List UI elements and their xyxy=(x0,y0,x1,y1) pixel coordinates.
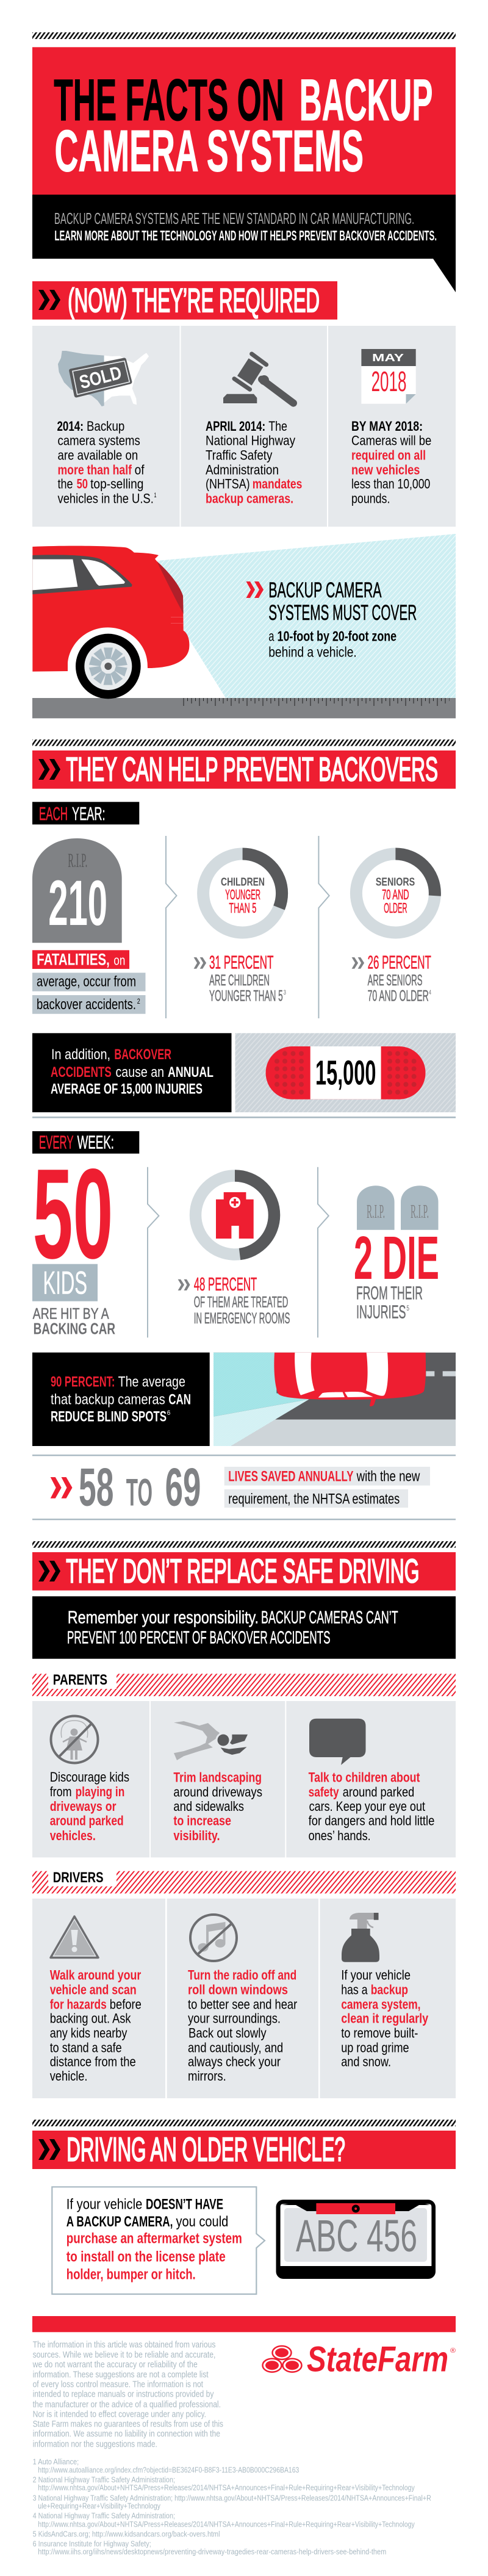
text: walk around xyxy=(50,1967,142,2084)
heading: (now) they're required xyxy=(32,281,337,320)
text: talk to children: Talk to children about xyxy=(309,1770,420,1785)
heading: drivers xyxy=(32,1869,456,1893)
panel: bandage 15,000 xyxy=(235,1033,456,1112)
text: sources: ule+Requiring+Rear+Visibility+Technology xyxy=(38,2502,161,2511)
text: 2014: are available on xyxy=(57,447,138,462)
callout: aftermarket system: If your vehicle xyxy=(66,2196,142,2213)
panel: top view car xyxy=(214,1353,456,1446)
text: clean camera: and snow. xyxy=(341,2054,391,2070)
text: turn the radio off: Back out slowly xyxy=(188,2025,267,2040)
stat: 50 kids: BACKING CAR xyxy=(34,1321,115,1338)
stat: 48 percent xyxy=(178,1274,290,1327)
text: clean camera: up road grime xyxy=(341,2040,409,2055)
text: walk around: to stand a safe xyxy=(50,2040,122,2055)
stat: 26 percent: ARE SENIORS xyxy=(368,972,422,989)
text: 2014: 1 xyxy=(154,492,156,499)
stat: 31 percent: ARE CHILDREN xyxy=(209,972,270,989)
icon: wheel xyxy=(76,634,141,699)
stat: children donut: CHILDREN xyxy=(221,876,265,888)
stat: 58 to 69 lives saved: TO xyxy=(126,1472,152,1514)
panel: 90 percent text: REDUCE BLIND SPOTS xyxy=(51,1408,167,1425)
icon: car side view xyxy=(32,546,189,699)
text: turn the radio off: mirrors. xyxy=(188,2068,226,2084)
text: walk around: vehicle and scan xyxy=(50,1982,137,1997)
text: april 2014: Traffic Safety xyxy=(206,447,272,462)
tombstone: 210: R.I.P. xyxy=(68,850,87,872)
stat: 31 percent xyxy=(194,952,286,1005)
text: sources: 6 Insurance Institute for Highway Safety; xyxy=(33,2540,151,2549)
logo: state farm: ® xyxy=(450,2347,456,2355)
text: discourage kids xyxy=(50,1769,129,1843)
text: clean camera: If your vehicle xyxy=(341,1967,411,1982)
heading: drivers: DRIVERS xyxy=(53,1869,104,1886)
icon: calendar: MAY xyxy=(372,351,404,364)
text: 2014: top-selling xyxy=(90,476,143,491)
text: sources: 2 National Highway Traffic Safety Administration; xyxy=(33,2476,175,2484)
icon: two tombstones xyxy=(357,1185,438,1230)
stat: seniors donut: 70 AND xyxy=(382,887,409,902)
text: sources: http://www.nhtsa.gov/About+NHTSA/Press+Releases/2014/NHTSA+Announces+Final+Rule+Requiring+Rear+Visibility+Technology xyxy=(38,2484,415,2492)
text: disclaimer: information. We assume no liability in connection with the xyxy=(33,2430,220,2439)
callout: backup camera coverage: a xyxy=(268,628,274,644)
panel: april 2014 xyxy=(181,326,327,527)
panel: injuries text: cause an xyxy=(116,1064,164,1081)
panel: injuries text: AVERAGE OF 15,000 INJURIES xyxy=(51,1081,203,1098)
text: talk to children: safety xyxy=(309,1784,339,1799)
text: 2014: vehicles in the U.S. xyxy=(57,491,154,506)
panel: 90 percent text: that backup cameras xyxy=(51,1392,165,1408)
text: clean camera xyxy=(341,1967,429,2070)
text: april 2014: backup cameras. xyxy=(206,491,293,506)
panel: 2014 sold xyxy=(32,326,179,527)
text: talk to children: ones’ hands. xyxy=(309,1828,371,1843)
text: 2014: Backup xyxy=(87,419,124,434)
panel: injuries text: BACKOVER xyxy=(114,1046,171,1063)
text: april 2014: The xyxy=(268,419,287,434)
text: walk around: before xyxy=(110,1996,142,2012)
stat: 58 to 69 lives saved: 69 xyxy=(165,1457,201,1517)
label: each year xyxy=(32,802,139,824)
panel: talk to children xyxy=(286,1701,456,1857)
text: by may 2018: pounds. xyxy=(351,491,390,506)
text: 2014: 2014: xyxy=(57,419,84,434)
panel: trim landscaping xyxy=(151,1701,285,1857)
panel: injuries text: ANNUAL xyxy=(168,1064,214,1081)
stat: 50 kids: ARE HIT BY A xyxy=(33,1306,109,1323)
panel: bandage 15,000: 15,000 xyxy=(315,1053,376,1092)
text: disclaimer: intended to replace manuals or instructions provided by xyxy=(33,2390,214,2400)
text: trim landscaping: Trim landscaping xyxy=(173,1770,262,1785)
callout: backup camera coverage: behind a vehicle. xyxy=(268,644,357,660)
stat: children donut: THAN 5 xyxy=(229,900,256,916)
stat: 58 to 69 lives saved: requirement, the NHTSA estimates xyxy=(228,1491,400,1507)
text: april 2014: National Highway xyxy=(206,433,295,448)
text: turn the radio off xyxy=(188,1967,297,2084)
text: disclaimer: information. These suggestions are not a complete list xyxy=(33,2370,209,2380)
text: disclaimer: information nor the suggestions made. xyxy=(33,2440,157,2450)
stat: 31 percent: 31 PERCENT xyxy=(209,952,273,973)
panel: 90 percent text: 90 PERCENT: xyxy=(51,1374,115,1391)
tombstone: 210 xyxy=(32,838,122,943)
text: talk to children: for dangers and hold little xyxy=(309,1813,434,1829)
intro speech box xyxy=(32,195,456,292)
camera zone xyxy=(157,534,456,698)
text: turn the radio off: roll down windows xyxy=(188,1982,288,1997)
text: sources: 3 National Highway Traffic Safety Administration; http://www.nhtsa.gov/About+NHTSA/Press+Releases/2014/NHTSA+Announces+Final+R xyxy=(33,2494,431,2503)
panel: walk around xyxy=(32,1899,165,2098)
panel: discourage kids xyxy=(32,1701,149,1857)
text: by may 2018 xyxy=(351,419,431,506)
text: trim landscaping xyxy=(173,1770,262,1843)
stat: seniors donut: SENIORS xyxy=(376,876,415,888)
text: disclaimer: of every loss control measure. The information is not xyxy=(33,2380,203,2390)
icon: license plate with camera xyxy=(276,2200,436,2279)
heading: parents xyxy=(32,1672,456,1696)
text: turn the radio off: and cautiously, and xyxy=(188,2040,283,2055)
stat: 2 die: INJURIES xyxy=(356,1302,406,1323)
text: disclaimer: we do not warrant the accuracy or reliability of the xyxy=(32,2360,198,2370)
stat: 58 to 69 lives saved xyxy=(51,1457,430,1517)
text: by may 2018: BY MAY 2018: xyxy=(351,419,423,434)
stat: 26 percent: 4 xyxy=(429,989,431,996)
ground ruler xyxy=(32,698,456,718)
text: by may 2018: Cameras will be xyxy=(351,433,431,448)
panel: clean camera xyxy=(320,1899,456,2098)
text: walk around: for hazards xyxy=(50,1996,107,2012)
text: talk to children: cars. Keep your eye out xyxy=(309,1799,425,1814)
icon: car from above xyxy=(274,1353,426,1406)
label: every week xyxy=(32,1131,139,1154)
panel: injuries text: ACCIDENTS xyxy=(51,1064,112,1081)
text: sources: 4 National Highway Traffic Safety Administration; xyxy=(33,2512,175,2520)
stat: 50 kids: KIDS xyxy=(43,1265,87,1301)
text: april 2014: mandates xyxy=(253,476,302,491)
stat: 31 percent: 3 xyxy=(284,989,286,996)
text: turn the radio off: always check your xyxy=(188,2054,281,2070)
panel: by may 2018 xyxy=(328,326,456,527)
text: discourage kids: playing in xyxy=(76,1784,124,1799)
panel: remember your responsibility: Remember your responsibility. xyxy=(68,1608,259,1628)
text: clean camera: has a xyxy=(341,1982,368,1997)
title: THE FACTS ON xyxy=(54,68,284,133)
text: 2014 xyxy=(57,419,156,506)
panel: injuries text xyxy=(32,1033,232,1112)
text: sources: 5 KidsAndCars.org; http://www.kidsandcars.org/back-overs.html xyxy=(33,2530,220,2539)
text: april 2014 xyxy=(206,419,302,506)
text: disclaimer: State Farm makes no guarantees of results from use of this xyxy=(33,2420,223,2430)
text: 2014: camera systems xyxy=(57,433,140,448)
heading: parents: PARENTS xyxy=(53,1672,107,1688)
text: talk to children: around parked xyxy=(343,1784,414,1799)
text: april 2014: Administration xyxy=(206,462,279,477)
stat: 48 percent: IN EMERGENCY ROOMS xyxy=(194,1310,290,1327)
text: fatalities: 2 xyxy=(137,997,140,1006)
stat: children donut: YOUNGER xyxy=(225,887,260,902)
panel: injuries text: In addition, xyxy=(51,1046,110,1063)
icon: two tombstones: R.I.P. xyxy=(411,1200,429,1222)
text: trim landscaping: around driveways xyxy=(173,1784,262,1799)
text: walk around: Walk around your xyxy=(50,1967,142,1982)
title xyxy=(54,68,432,184)
callout: aftermarket system: DOESN’T HAVE xyxy=(146,2196,223,2213)
stat: 2 die: 5 xyxy=(406,1304,409,1312)
label: every week: EVERY xyxy=(39,1132,73,1153)
callout: backup camera coverage: BACKUP CAMERA xyxy=(268,578,382,602)
stat: 50 kids xyxy=(32,1142,115,1338)
callout: aftermarket system: holder, bumper or hitch. xyxy=(66,2267,196,2283)
label: every week: WEEK: xyxy=(77,1132,114,1153)
text: disclaimer xyxy=(32,2340,223,2450)
text: trim landscaping: visibility. xyxy=(173,1828,220,1843)
text: fatalities: backover accidents. xyxy=(37,996,136,1013)
tombstone: 210: 210 xyxy=(48,868,107,939)
icon: calendar xyxy=(361,349,416,404)
logo: state farm xyxy=(262,2340,456,2380)
text: turn the radio off: your surroundings. xyxy=(188,2011,281,2026)
text: fatalities xyxy=(32,950,145,1014)
panel: coverage zone xyxy=(32,534,456,718)
text: walk around: any kids nearby xyxy=(50,2025,127,2040)
label: each year: EACH xyxy=(39,803,68,824)
icon: gavel xyxy=(223,354,293,403)
text: discourage kids: driveways or xyxy=(50,1799,117,1814)
text: discourage kids: around parked xyxy=(50,1813,124,1829)
panel: 90 percent text xyxy=(32,1353,210,1446)
label: each year: YEAR: xyxy=(72,803,106,824)
icon: no music xyxy=(190,1915,237,1961)
text: april 2014: APRIL 2014: xyxy=(206,419,265,434)
text: trim landscaping: to increase xyxy=(173,1813,231,1829)
callout: aftermarket system: you could xyxy=(176,2214,228,2230)
callout: backup camera coverage: 10-foot by 20-foot zone xyxy=(277,628,396,644)
text: clean camera: clean it regularly xyxy=(341,2011,429,2026)
title panel xyxy=(32,47,456,195)
stat: 26 percent xyxy=(352,952,431,1005)
text: sources: http://www.iihs.org/iihs/news/desktopnews/preventing-driveway-tragedies-rear-cameras-help-drivers-see-behind-them xyxy=(38,2548,386,2556)
panel: 90 percent text: CAN xyxy=(168,1392,191,1408)
stat: hospital donut xyxy=(195,1176,274,1254)
text: disclaimer: the manufacturer or the advice of a qualified professional. xyxy=(33,2400,221,2410)
icon: sold map: SOLD xyxy=(77,362,124,393)
text: turn the radio off: Turn the radio off and xyxy=(188,1967,296,1982)
text: walk around: distance from the xyxy=(50,2054,136,2070)
text: disclaimer: sources. While we believe it to be reliable and accurate, xyxy=(33,2350,215,2360)
icon: pruning shears xyxy=(174,1721,248,1760)
stat: 50 kids: 50 xyxy=(33,1142,113,1286)
text: 2014: of xyxy=(135,462,145,477)
icon: calendar: 2018 xyxy=(371,365,406,397)
text: 2014: 50 xyxy=(77,476,88,491)
callout: aftermarket system xyxy=(52,2187,265,2294)
panel: turn the radio off xyxy=(167,1899,318,2098)
stat: children donut xyxy=(203,854,282,932)
icon: hospital xyxy=(216,1192,254,1239)
text: by may 2018: new vehicles xyxy=(351,462,420,477)
text: trim landscaping: and sidewalks xyxy=(173,1799,244,1814)
icon: no playing xyxy=(51,1716,98,1763)
icon: two tombstones: R.I.P. xyxy=(367,1200,385,1222)
callout: aftermarket system: A BACKUP CAMERA, xyxy=(66,2214,173,2230)
stat: 48 percent: OF THEM ARE TREATED xyxy=(194,1293,288,1311)
stat: 2 die: FROM THEIR xyxy=(356,1283,423,1303)
text: walk around: backing out. Ask xyxy=(50,2011,131,2026)
text: sources xyxy=(33,2458,431,2556)
stat: 48 percent: 48 PERCENT xyxy=(194,1274,257,1295)
icon: license plate with camera: ABC 456 xyxy=(296,2211,417,2261)
icon: sold map xyxy=(58,351,149,406)
text: 2014: the xyxy=(57,476,73,491)
text: april 2014: (NHTSA) xyxy=(206,476,250,491)
callout: aftermarket system: to install on the license plate xyxy=(66,2249,226,2265)
icon: warning triangle xyxy=(51,1916,98,1957)
stat: 58 to 69 lives saved: with the new xyxy=(356,1468,420,1484)
stat: 31 percent: YOUNGER THAN 5 xyxy=(209,988,283,1005)
panel: remember your responsibility xyxy=(32,1596,456,1659)
text: turn the radio off: to better see and hear xyxy=(188,1996,297,2012)
text: sources: http://www.autoalliance.org/index.cfm?objectid=BE3624F0-B8F3-11E3-AB0B000C296BA163 xyxy=(38,2466,299,2475)
text: disclaimer: The information in this article was obtained from various xyxy=(33,2340,215,2350)
icon: spray bottle xyxy=(342,1913,379,1962)
stat: 2 die xyxy=(354,1185,439,1323)
text: clean camera: backup xyxy=(371,1982,408,1997)
panel: 90 percent text: The average xyxy=(118,1374,185,1391)
text: by may 2018: less than 10,000 xyxy=(351,476,430,491)
text: discourage kids: Discourage kids xyxy=(50,1769,129,1785)
stat: 26 percent: 70 AND OLDER xyxy=(368,988,429,1005)
text: talk to children xyxy=(309,1770,434,1843)
text: sources: http://www.nhtsa.gov/About+NHTSA/Press+Releases/2014/NHTSA+Announces+Final+Rule+Requiring+Rear+Visibility+Technology xyxy=(38,2520,415,2529)
text: 2014: more than half xyxy=(57,462,132,477)
logo: state farm: StateFarm xyxy=(307,2340,448,2380)
stat: 58 to 69 lives saved: LIVES SAVED ANNUALLY xyxy=(228,1468,354,1484)
text: walk around: vehicle. xyxy=(50,2068,88,2084)
text: discourage kids: vehicles. xyxy=(50,1828,96,1843)
text: fatalities: on xyxy=(113,953,125,968)
text: fatalities: FATALITIES, xyxy=(37,951,110,969)
icon: speech bubble xyxy=(309,1719,366,1765)
text: by may 2018: required on all xyxy=(351,447,426,462)
text: disclaimer: Nor is it intended to effect coverage under any policy. xyxy=(33,2410,206,2420)
callout: aftermarket system: purchase an aftermarket system xyxy=(66,2231,242,2247)
text: sources: 1 Auto Alliance; xyxy=(33,2458,79,2466)
stat: seniors donut: OLDER xyxy=(384,900,407,916)
text: discourage kids: from xyxy=(50,1784,72,1799)
panel: remember your responsibility: BACKUP CAMERAS CAN’T xyxy=(261,1608,398,1628)
stat: 58 to 69 lives saved: 58 xyxy=(79,1457,113,1517)
text: clean camera: camera system, xyxy=(341,1996,421,2012)
callout: backup camera coverage xyxy=(246,578,417,660)
text: fatalities: average, occur from xyxy=(37,974,136,990)
stat: seniors donut xyxy=(356,854,435,932)
panel: 90 percent text: 6 xyxy=(167,1409,170,1417)
stat: 26 percent: 26 PERCENT xyxy=(368,952,431,973)
text: clean camera: to remove built- xyxy=(341,2025,418,2040)
